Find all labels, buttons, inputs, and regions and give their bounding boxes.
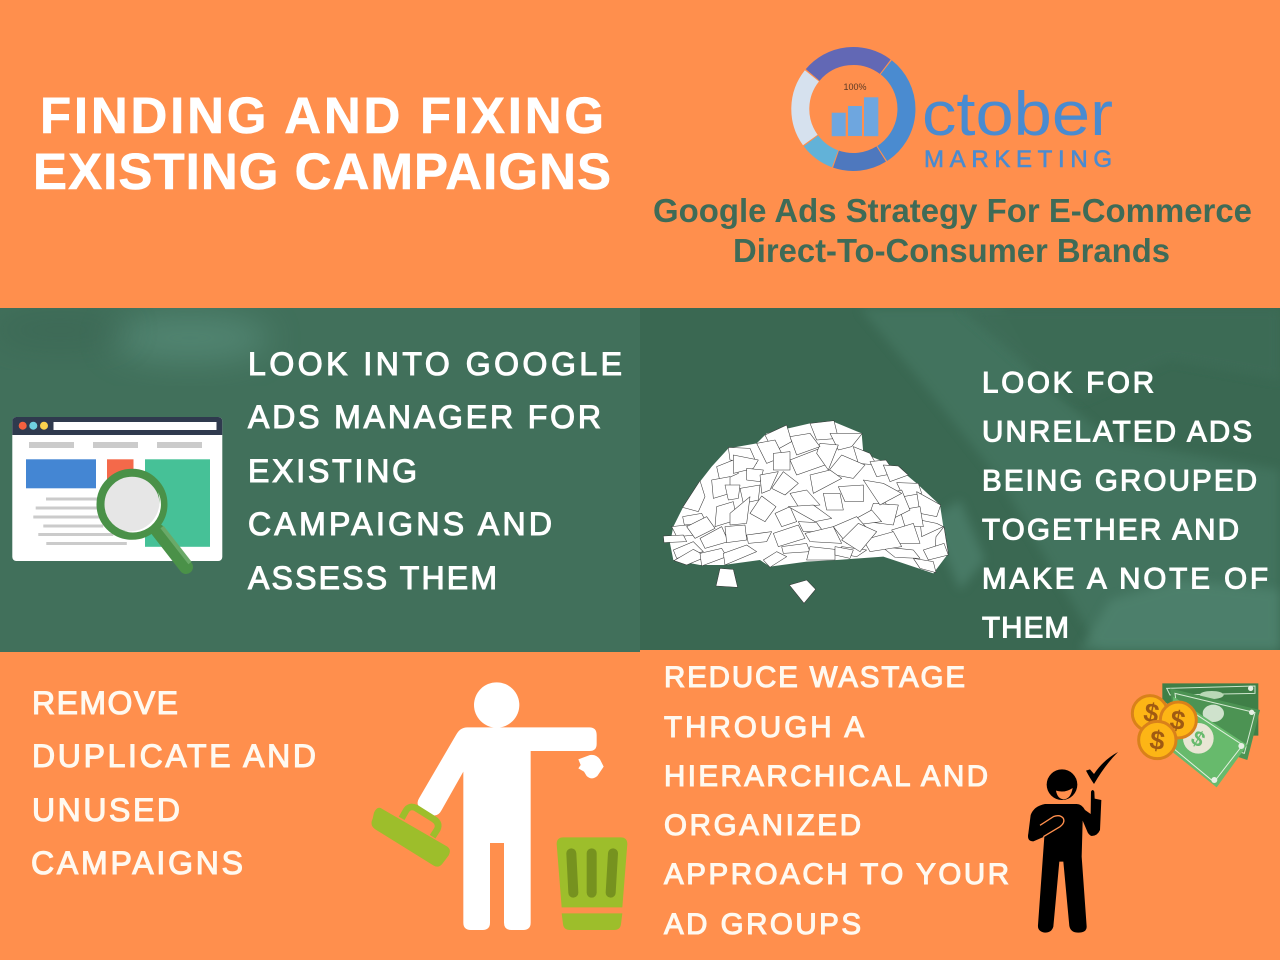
- text: look into google ads manager: ADS MANAGER FOR: [248, 399, 601, 435]
- text: look into google ads manager: ASSESS THEM: [248, 560, 497, 596]
- text: look for unrelated ads: UNRELATED ADS: [982, 416, 1252, 448]
- text: reduce wastage: THROUGH A: [664, 711, 864, 744]
- subtitle: Google Ads Strategy For E-Commerce: [653, 192, 1252, 229]
- text: remove duplicate campaigns: CAMPAIGNS: [31, 845, 243, 881]
- trash bin: [557, 837, 627, 930]
- text: look for unrelated ads: [982, 366, 1268, 644]
- bank notes: [1162, 683, 1260, 787]
- bank notes: $: [1187, 726, 1209, 752]
- logo percentage: 100%: [843, 82, 867, 92]
- text: look into google ads manager: EXISTING: [248, 453, 417, 489]
- person figure: [418, 682, 604, 930]
- icon: person throwing trash: [371, 682, 627, 930]
- text: reduce wastage: ORGANIZED: [664, 809, 861, 842]
- browser window: [12, 417, 222, 561]
- logo subtitle: MARKETING: [924, 146, 1112, 173]
- text: reduce wastage: [664, 661, 1009, 941]
- logo bars: [832, 97, 878, 136]
- text: look into google ads manager: [248, 346, 622, 596]
- gold coins: $: [1148, 724, 1167, 756]
- title: EXISTING CAMPAIGNS: [33, 143, 611, 200]
- logo donut chart: [800, 56, 906, 162]
- person figure: [1028, 769, 1101, 933]
- text: look for unrelated ads: BEING GROUPED: [982, 464, 1257, 498]
- text: reduce wastage: AD GROUPS: [664, 908, 861, 941]
- text: remove duplicate campaigns: DUPLICATE AND: [32, 738, 316, 774]
- text: look for unrelated ads: MAKE A NOTE OF: [982, 562, 1268, 596]
- icon: browser with magnifying glass: [12, 417, 222, 567]
- icon: pile of paper: [663, 421, 948, 603]
- logo: October Marketing: [800, 56, 1113, 173]
- text: look into google ads manager: LOOK INTO GOOGLE: [248, 346, 622, 382]
- subtitle: [653, 192, 1252, 269]
- text: remove duplicate campaigns: REMOVE: [32, 685, 178, 721]
- text: reduce wastage: REDUCE WASTAGE: [664, 661, 965, 694]
- text: reduce wastage: APPROACH TO YOUR: [664, 858, 1009, 891]
- briefcase: [371, 807, 450, 867]
- text: look for unrelated ads: TOGETHER AND: [982, 514, 1239, 546]
- gold coins: [1132, 696, 1196, 759]
- gold coins: $: [1168, 704, 1188, 736]
- logo wordmark: ctober: [922, 80, 1113, 149]
- text: remove duplicate campaigns: [31, 685, 316, 881]
- magnifying glass: [100, 473, 190, 567]
- text: look for unrelated ads: THEM: [982, 612, 1069, 644]
- subtitle: Direct-To-Consumer Brands: [733, 232, 1170, 269]
- panel: green right: [640, 308, 1280, 650]
- gold coins: $: [1141, 697, 1162, 729]
- icon: man pointing at money: [1028, 683, 1260, 933]
- title: [33, 87, 611, 200]
- text: reduce wastage: HIERARCHICAL AND: [664, 760, 988, 793]
- text: look into google ads manager: CAMPAIGNS AND: [248, 506, 552, 542]
- check mark: [1086, 752, 1118, 784]
- text: look for unrelated ads: LOOK FOR: [982, 366, 1154, 400]
- title: FINDING AND FIXING: [40, 87, 604, 144]
- panel: green left: [0, 308, 640, 652]
- text: remove duplicate campaigns: UNUSED: [32, 792, 180, 828]
